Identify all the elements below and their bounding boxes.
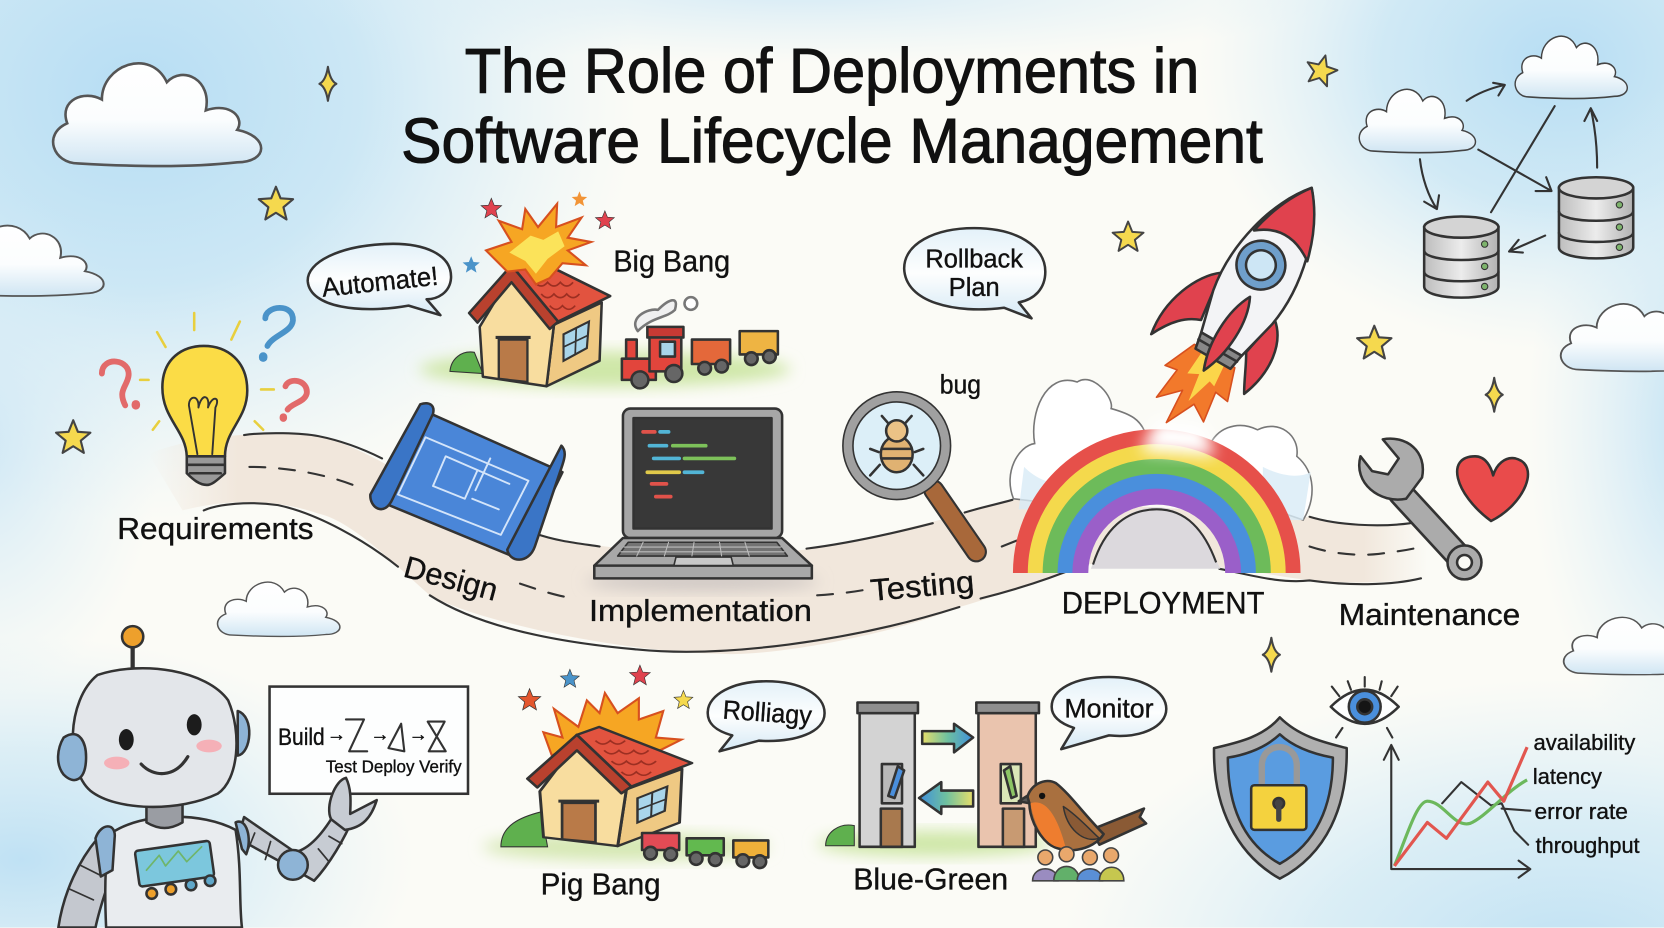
decorative clouds [0,63,1664,675]
sign: pipeline: → [370,725,389,746]
tower: blue [857,702,918,847]
speech bubble: Monitor [1052,677,1166,749]
robot body [58,626,377,927]
speech bubble: Automate! [308,244,451,315]
explosion [463,191,614,284]
train cars [642,833,768,868]
train [622,297,778,388]
flame [1141,337,1244,444]
icon: blueprint scroll [370,403,565,560]
body [1190,170,1343,362]
bush [501,812,548,847]
icon: rainbow bridge [1021,437,1293,573]
fins [1150,257,1227,352]
database left [1424,216,1498,298]
centre fin [1197,292,1257,376]
network clouds [1359,36,1627,153]
sign: pipeline: Test Deploy Verify [326,757,462,777]
sign: pipeline: Build [278,724,325,751]
grass [483,833,769,861]
label: Implementation: Implementation [589,593,812,628]
sign: pipeline [270,687,468,794]
speech bubble: Rolliagy: Rolliagy [722,695,814,731]
robin bird [1019,781,1146,850]
label: Big Bang (top): Big Bang [613,244,730,279]
title [401,36,1263,176]
arrow right [922,724,973,752]
axes [1384,745,1530,878]
illustration: blue-green towers and canary [817,702,1146,881]
illustration: Big Bang house (bottom) [483,665,769,868]
icon: wrench and heart [1359,439,1528,579]
icon: light bulb with question marks [102,308,307,485]
grass [817,831,1051,856]
crowd [1033,847,1124,881]
series: red [1394,747,1527,866]
line chart: metrics: latency [1533,764,1603,789]
line chart: metrics [1384,730,1640,878]
house [469,257,610,386]
bush [450,352,483,374]
engine [1193,332,1242,370]
sign: pipeline: → [409,725,428,746]
exhaust smoke [1141,419,1215,456]
database right [1559,177,1633,258]
icon: laptop with code [586,409,819,591]
title: Software Lifecycle Management [401,106,1263,176]
house [527,727,692,846]
stars and sparkles [56,51,1503,672]
label: Blue-Green: Blue-Green [853,861,1008,896]
illustration: Big Bang house with train [419,191,791,388]
line chart: metrics: error rate [1535,799,1628,824]
grass [419,351,791,387]
label: Testing: Testing [869,564,976,608]
road: lifecycle path [149,433,1427,654]
clouds behind rainbow [1010,380,1312,520]
speech bubble: Rollback Plan: Plan [949,274,1000,302]
arrow left [919,782,973,814]
icon: rocket launch [1116,154,1357,456]
bush [826,825,854,846]
network arrows [1420,83,1597,253]
padlock [1251,747,1306,830]
icon: magnifying glass with bug [848,397,976,552]
speech bubble: Rolliagy [708,681,825,751]
series: black [1442,782,1528,845]
line chart: metrics: throughput [1536,833,1640,858]
label: Maintenance: Maintenance [1339,597,1520,632]
series: green [1394,780,1527,866]
metric labels: availability [1533,730,1636,755]
explosion [518,665,693,756]
icon: security shield with padlock [1214,717,1347,879]
label: DEPLOYMENT: DEPLOYMENT [1062,584,1264,620]
icon: network of clouds and databases [1359,36,1633,298]
speech bubble: Rollback Plan: Rollback [925,245,1023,273]
bug [870,416,923,475]
label: Design: Design [400,549,502,608]
speech bubble: Monitor: Monitor [1064,693,1154,723]
sign: pipeline: → [327,725,346,746]
robot mascot holding pipeline sign [58,626,468,927]
speech bubble: Automate!: Automate! [320,261,440,303]
label: Requirements: Requirements [117,511,314,546]
label: bug: bug [940,370,981,400]
question marks [102,308,307,418]
label: Pig Bang: Pig Bang [541,867,661,902]
window [1228,232,1294,298]
code lines [643,432,734,497]
speech bubble: Rollback Plan [904,228,1045,318]
nose cone [1254,174,1340,261]
connector [1502,809,1530,811]
title: The Role of Deployments in [465,36,1199,106]
tower: green [976,702,1039,847]
icon: watching eye [1331,677,1399,738]
